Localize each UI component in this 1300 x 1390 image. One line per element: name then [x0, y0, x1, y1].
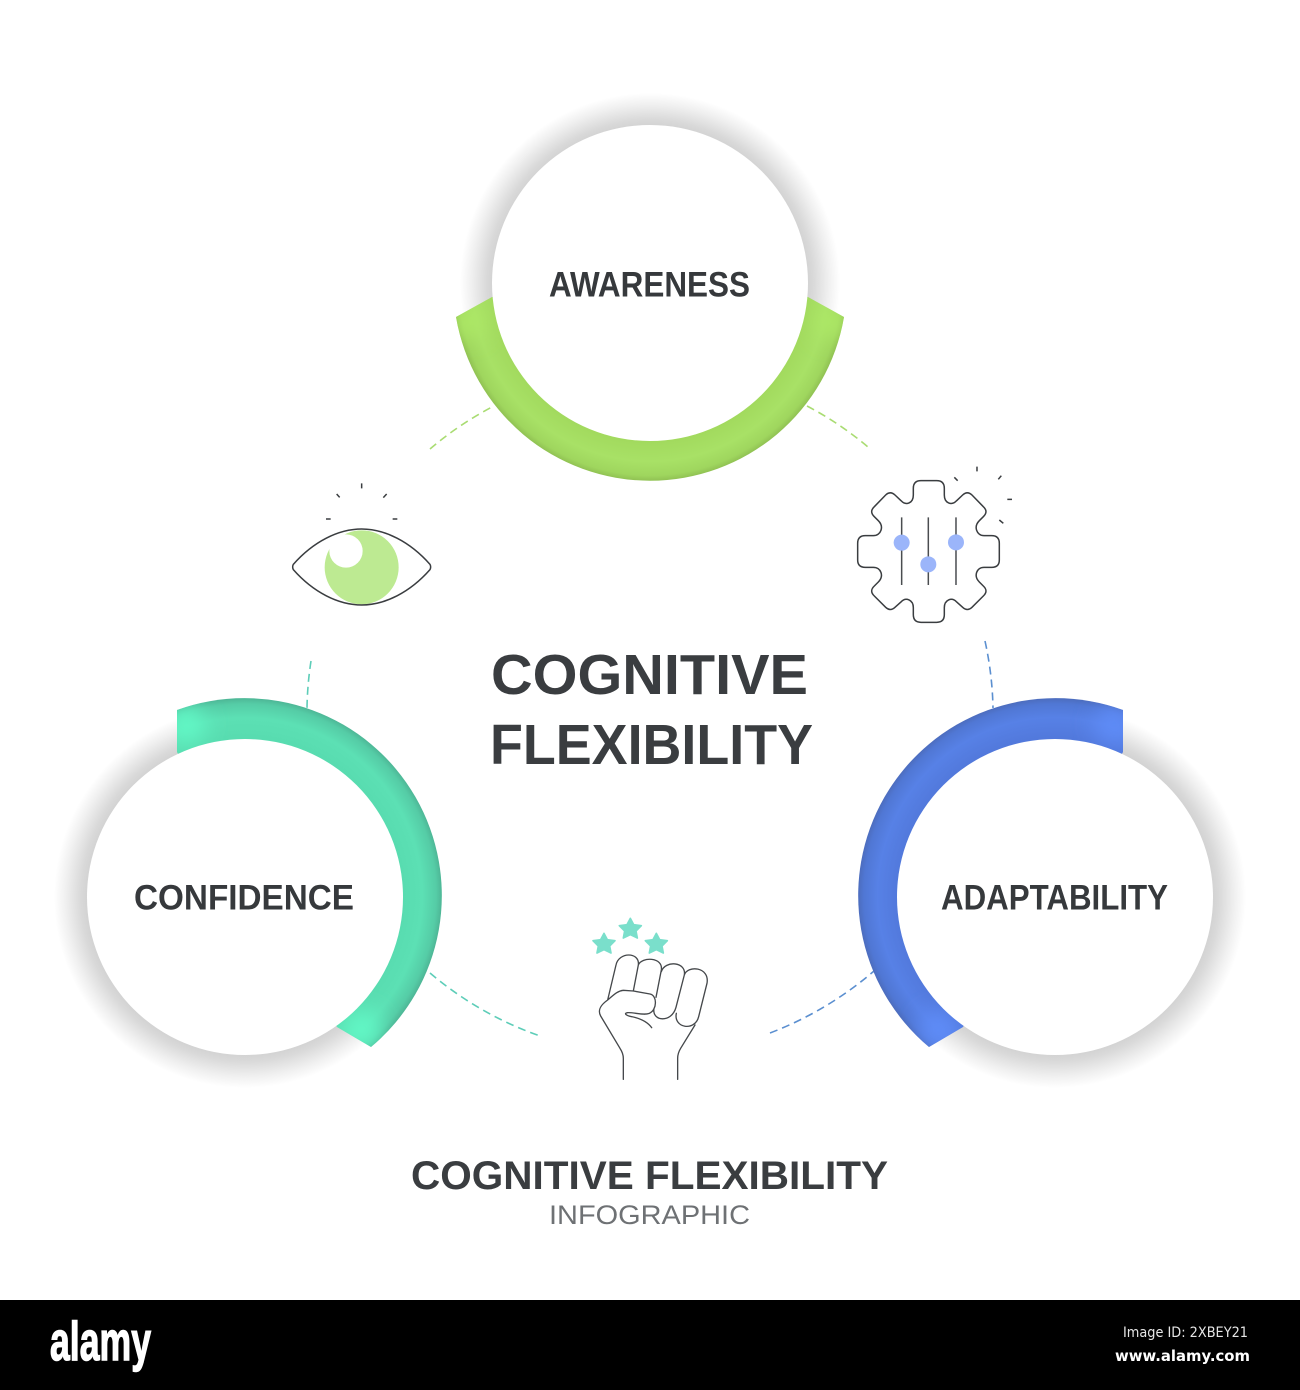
connector: blue dashed arc upper — [985, 641, 993, 708]
eye iris — [325, 530, 399, 604]
eye highlight — [329, 534, 363, 568]
panel: adaptability circle — [850, 690, 1246, 1088]
footer subheading: INFOGRAPHIC — [549, 1200, 750, 1230]
awareness shadow — [460, 93, 840, 473]
website: www.alamy.com — [1115, 1347, 1250, 1365]
watermark bar — [0, 1300, 1300, 1390]
title line one: COGNITIVE — [491, 643, 808, 707]
icon: raised fist with stars — [593, 918, 707, 1079]
connector: green dashed arc right — [807, 406, 868, 447]
eye outline — [293, 529, 431, 605]
adaptability shadow — [864, 706, 1246, 1088]
connector: green dashed arc left — [430, 407, 492, 449]
connector: teal dashed arc lower — [430, 973, 540, 1036]
confidence teal ring — [177, 698, 442, 1047]
connector: teal dashed arc upper — [307, 661, 311, 708]
center title — [490, 643, 813, 777]
slider knobs — [894, 534, 964, 572]
confidence label: CONFIDENCE — [134, 878, 354, 918]
icon: eye — [293, 483, 431, 605]
eye rays — [326, 483, 397, 519]
adaptability blue ring — [858, 698, 1123, 1047]
panel: confidence circle — [54, 690, 450, 1088]
gear rays — [954, 467, 1012, 523]
adaptability white disc — [897, 739, 1213, 1055]
image id: Image ID: 2XBEY21 — [1123, 1325, 1248, 1341]
gear outline — [858, 481, 999, 622]
connector: blue dashed arc lower — [770, 971, 874, 1033]
slider tracks — [902, 517, 956, 585]
alamy logo: alamy — [50, 1310, 151, 1372]
panel: awareness circle — [456, 99, 844, 481]
awareness green ring — [456, 297, 844, 481]
awareness label: AWARENESS — [549, 266, 750, 304]
confidence shadow — [54, 706, 436, 1088]
confidence white disc — [87, 739, 403, 1055]
three stars — [593, 918, 667, 953]
icon: gear with sliders — [858, 467, 1012, 622]
footer heading: COGNITIVE FLEXIBILITY — [411, 1154, 888, 1198]
adaptability label: ADAPTABILITY — [941, 878, 1168, 918]
black strip — [0, 1300, 1300, 1390]
fist outline — [599, 955, 707, 1079]
awareness white disc — [492, 125, 808, 441]
title line two: FLEXIBILITY — [490, 713, 813, 777]
